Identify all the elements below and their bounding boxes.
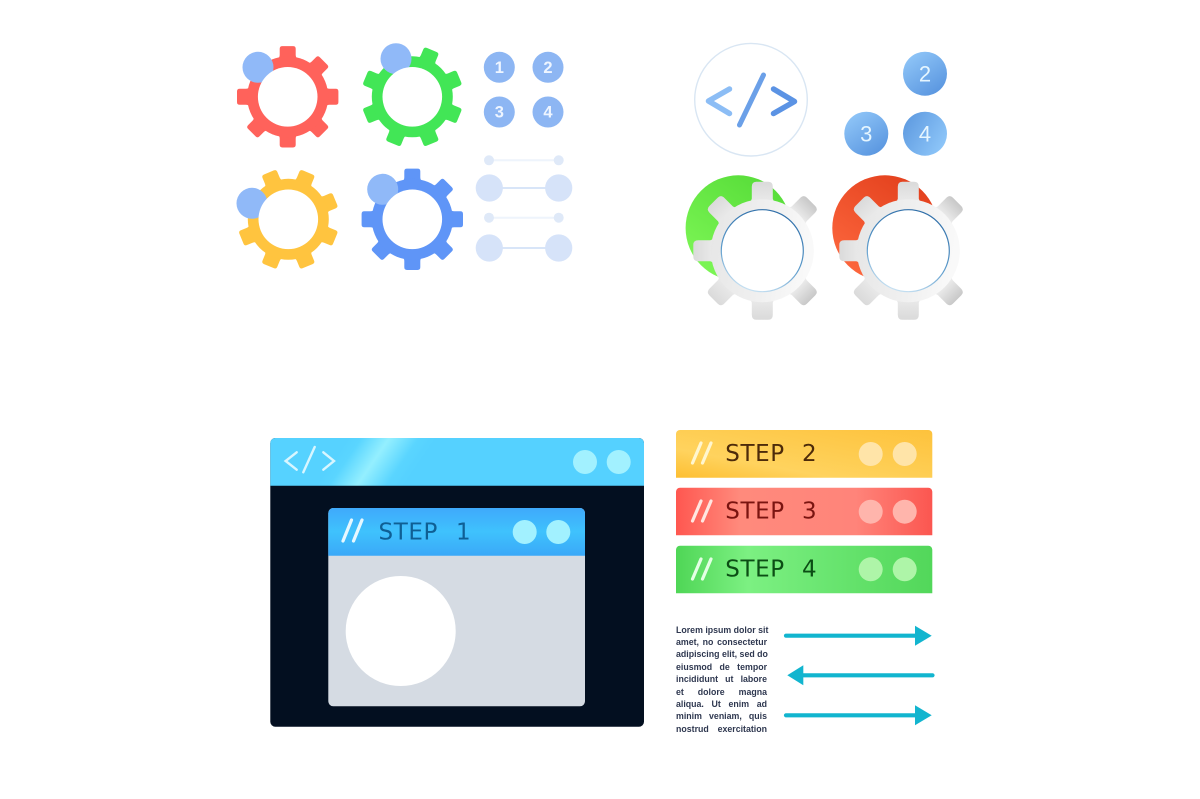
text block: lorem ipsum xyxy=(676,624,768,734)
badge 4: 4 xyxy=(543,104,553,122)
white circle xyxy=(346,576,456,686)
connector 3 xyxy=(484,213,564,223)
inner body xyxy=(328,508,585,706)
badge 2: 2 xyxy=(543,59,553,77)
connector 1 xyxy=(484,155,564,165)
text block: lorem ipsum: incididunt ut labore xyxy=(676,674,767,684)
inner panel: step 1 xyxy=(328,508,585,706)
step 4 bar xyxy=(676,546,932,593)
connector 4 xyxy=(476,234,572,262)
window header xyxy=(270,438,644,486)
step 3 bar: 3 xyxy=(802,499,817,525)
badge 1: 1 xyxy=(495,59,504,77)
icon: blue gear xyxy=(362,169,463,270)
arrow: right 2 xyxy=(786,705,932,725)
icon: grey gear on red disc xyxy=(832,175,966,320)
icon: red gear xyxy=(237,46,338,147)
dots xyxy=(513,520,570,544)
step 3 bar xyxy=(676,488,932,535)
arrow: right 1 xyxy=(786,626,932,646)
slashes xyxy=(343,520,362,541)
ball 3: 3 xyxy=(860,122,872,146)
icon: grey gear on green disc xyxy=(686,175,820,320)
gradient number balls xyxy=(844,52,947,156)
step 2 bar: 2 xyxy=(802,441,817,467)
icon: yellow gear xyxy=(222,153,355,286)
panel: browser window xyxy=(270,438,644,727)
step 4 bar: 4 xyxy=(802,556,817,582)
connector 2 xyxy=(476,174,572,202)
text block: lorem ipsum: amet, no consectetur xyxy=(676,637,767,647)
connector dumbbells xyxy=(476,155,572,262)
text block: lorem ipsum: nostrud exercitation xyxy=(676,724,767,734)
text block: lorem ipsum: Lorem ipsum dolor sit xyxy=(676,624,768,634)
ball 4: 4 xyxy=(919,122,931,146)
header dots xyxy=(573,450,631,474)
text block: lorem ipsum: aliqua. Ut enim ad xyxy=(676,699,767,709)
step 2 bar: STEP xyxy=(725,441,785,467)
window body xyxy=(270,438,644,727)
icon: green gear xyxy=(346,31,479,163)
step 4 bar: STEP xyxy=(725,556,785,582)
badge 3: 3 xyxy=(495,104,504,122)
icon: header code symbol xyxy=(286,447,334,472)
heading: step 1: STEP xyxy=(378,520,438,546)
text block: lorem ipsum: eiusmod de tempor xyxy=(676,662,767,672)
text block: lorem ipsum: minim veniam, quis xyxy=(676,711,767,721)
text block: lorem ipsum: et dolore magna xyxy=(676,687,767,697)
step 3 bar: STEP xyxy=(725,499,785,525)
text block: lorem ipsum: adipiscing elit, sed do xyxy=(676,649,768,659)
icon: code symbol in circle xyxy=(695,43,807,156)
heading: step 1: 1 xyxy=(456,520,471,546)
inner header xyxy=(328,508,585,556)
ball 2: 2 xyxy=(919,62,931,86)
arrow: left xyxy=(787,665,932,685)
number badges 1-4 xyxy=(484,52,564,128)
step 2 bar xyxy=(676,430,932,478)
